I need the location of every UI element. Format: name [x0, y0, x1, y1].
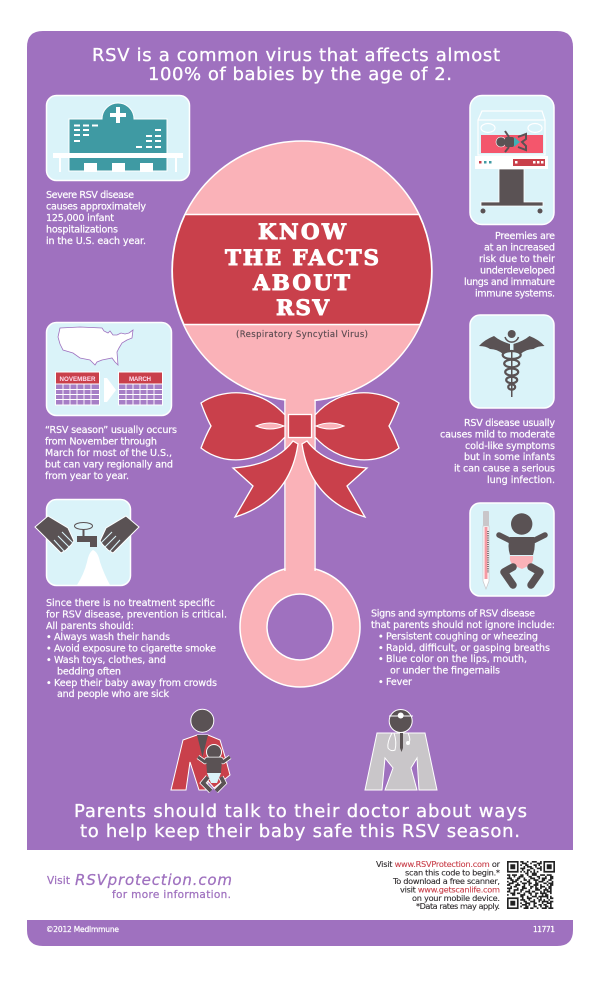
copyright: ©2012 MedImmune: [46, 925, 119, 934]
icon: caduceus: [470, 315, 554, 408]
title: 100% of babies by the age of 2.: [148, 64, 452, 85]
icon: hand washing: [35, 500, 139, 586]
closing message: [74, 801, 527, 842]
scan instructions: Visit www.RSVProtection.com or: [376, 859, 501, 869]
text: warning signs: or under the fingernails: [390, 666, 500, 676]
text: prevention: Keep their baby away from crowds: [54, 678, 217, 689]
bow slits: [256, 423, 344, 429]
panel: purple background: [27, 31, 573, 850]
text: prevention: Wash toys, clothes, and: [54, 655, 166, 666]
text: prevention: and people who are sick: [57, 689, 169, 700]
text: prevention: bedding often: [57, 666, 121, 678]
text: rsv season: but can vary regionally and: [45, 460, 173, 470]
code number: 11771: [533, 925, 555, 934]
text: warning signs: •: [378, 677, 384, 688]
scan instructions: visit www.getscanlife.com: [400, 884, 500, 894]
text: prevention: Avoid exposure to cigarette smoke: [54, 644, 216, 654]
text: warning signs: Fever: [386, 677, 412, 688]
text: hospitalizations: hospitalizations: [46, 224, 118, 236]
text: prevention: •: [46, 644, 52, 654]
subtitle: (Respiratory Syncytial Virus): [236, 330, 368, 340]
text: warning signs: •: [378, 632, 384, 642]
scan instructions: on your mobile device.: [412, 893, 500, 903]
text: prevention: •: [46, 632, 52, 643]
heading: know the facts: THE FACTS: [225, 246, 379, 271]
scan instructions: *Data rates may apply.: [416, 901, 500, 911]
text: preemies: underdeveloped: [480, 266, 555, 276]
text: prevention: •: [46, 655, 52, 666]
text: symptoms severity: lung infection.: [487, 475, 555, 486]
text: warning signs: Blue color on the lips, mouth,: [386, 654, 527, 665]
text: preemies: Preemies are: [495, 231, 555, 242]
icon: hospital: [46, 96, 190, 180]
scan instructions: [376, 859, 501, 911]
text: rsv season: from year to year.: [45, 471, 129, 482]
text: warning signs: Signs and symptoms of RSV disease: [371, 608, 535, 620]
text: rsv season: March for most of the U.S.,: [45, 448, 172, 459]
text: symptoms severity: [440, 418, 555, 486]
rattle head: [172, 141, 432, 401]
text: hospitalizations: Severe RSV disease: [46, 190, 134, 201]
text: symptoms severity: it can cause a serious: [454, 464, 555, 474]
text: preemies: immune systems.: [475, 288, 555, 300]
text: prevention: All parents should:: [46, 621, 134, 632]
icon: map and calendars: [46, 322, 172, 416]
water: [77, 550, 110, 585]
calendar: november: NOVEMBER: [60, 376, 96, 383]
rattle ring: [240, 567, 360, 687]
scan instructions: scan this code to begin.*: [405, 868, 500, 878]
calendar: march: MARCH: [129, 376, 152, 383]
left hand: [35, 516, 74, 553]
bow: [201, 393, 399, 517]
text: preemies: risk due to their: [479, 254, 555, 265]
arrow: [104, 378, 116, 402]
text: rsv season: [45, 425, 177, 482]
text: preemies: [464, 231, 555, 300]
website call to action: RSVprotection.com: [75, 871, 232, 889]
text: hospitalizations: [46, 190, 146, 247]
text: warning signs: that parents should not ignore include:: [371, 620, 555, 631]
icon: baby with thermometer: [470, 503, 554, 596]
text: rsv season: from November through: [45, 436, 157, 448]
red band: [172, 214, 432, 324]
thermometer: [483, 511, 489, 589]
text: prevention: Always wash their hands: [54, 632, 170, 643]
text: prevention: Since there is no treatment specific: [46, 598, 215, 609]
text: warning signs: Persistent coughing or wheezing: [386, 632, 538, 642]
text: prevention: for RSV disease, prevention is critical.: [46, 610, 227, 620]
text: preemies: at an increased: [484, 242, 555, 254]
website call to action: Visit: [47, 875, 70, 887]
text: symptoms severity: causes mild to moderate: [440, 430, 555, 440]
right hand: [100, 516, 139, 553]
text: hospitalizations: 125,000 infant: [46, 213, 114, 224]
text: hospitalizations: causes approximately: [46, 202, 146, 212]
website call to action: for more information.: [112, 889, 231, 901]
website call to action: [47, 871, 232, 901]
text: symptoms severity: RSV disease usually: [464, 418, 555, 429]
baby: [496, 131, 526, 152]
icon: parent holding baby: [171, 709, 230, 791]
text: warning signs: •: [378, 654, 384, 665]
qr code: [507, 861, 555, 909]
text: warning signs: Rapid, difficult, or gasping breaths: [386, 643, 550, 654]
panel: footer bar: [27, 920, 573, 946]
closing message: to help keep their baby safe this RSV season.: [80, 821, 520, 842]
title: RSV is a common virus that affects almost: [92, 45, 500, 66]
text: symptoms severity: but in some infants: [464, 452, 555, 463]
rattle stem: [285, 380, 315, 571]
rattle illustration: [172, 141, 432, 687]
text: hospitalizations: in the U.S. each year.: [46, 236, 146, 247]
icon: incubator: [470, 96, 554, 224]
closing message: Parents should talk to their doctor about ways: [74, 801, 527, 822]
heading: know the facts: [225, 220, 379, 321]
scan instructions: To download a free scanner,: [392, 876, 500, 886]
heading: know the facts: RSV: [276, 296, 329, 321]
heading: know the facts: ABOUT: [252, 271, 350, 296]
tap: [74, 522, 97, 547]
text: warning signs: [371, 608, 555, 688]
text: symptoms severity: cold-like symptoms: [465, 441, 555, 452]
title: [92, 45, 500, 85]
text: prevention: •: [46, 678, 52, 689]
text: warning signs: •: [378, 643, 384, 654]
text: prevention: [46, 598, 227, 700]
icon: doctor: [365, 710, 437, 790]
text: preemies: lungs and immature: [464, 277, 555, 288]
heading: know the facts: KNOW: [258, 220, 347, 245]
text: rsv season: “RSV season” usually occurs: [45, 425, 177, 436]
